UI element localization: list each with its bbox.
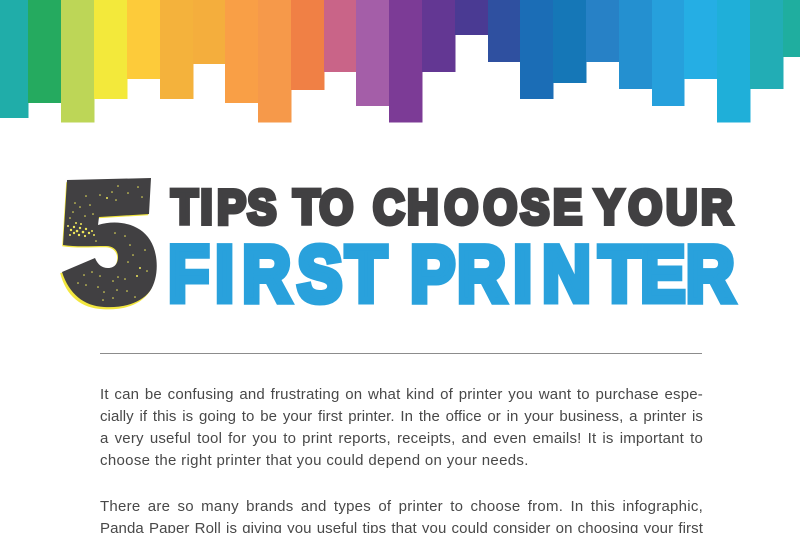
heading line one: tips to choose your xyxy=(171,180,732,234)
intro paragraph one xyxy=(100,386,703,469)
heading line one: tips to choose your: YOUR xyxy=(595,180,732,234)
heading line two: first printer: FIRST xyxy=(168,230,387,318)
icon: speckled number 5 xyxy=(60,178,157,309)
heading line one: tips to choose your: TO xyxy=(293,180,353,234)
heading line one: tips to choose your: TIPS xyxy=(171,180,276,234)
divider rule xyxy=(100,353,702,354)
heading line two: first printer xyxy=(168,230,734,318)
heading line two: first printer: PRINTER xyxy=(410,230,734,318)
colour bar skyline xyxy=(0,0,800,122)
title: 5 tips to choose your first printer xyxy=(60,178,738,318)
heading line one: tips to choose your: CHOOSE xyxy=(373,180,582,234)
intro paragraph one: It can be confusing and frustrating on what kind of printer you want to purchase espe- xyxy=(100,386,703,402)
intro paragraph one: a very useful tool for you to print reports, receipts, and even emails! It is important to xyxy=(100,430,703,447)
intro paragraph two xyxy=(100,498,703,533)
intro paragraph one: choose the right printer that you could depend on your needs. xyxy=(100,452,529,469)
intro paragraph two: There are so many brands and types of printer to choose from. In this infographic, xyxy=(100,498,703,514)
intro paragraph one: cially if this is going to be your first printer. In the office or in your business, a printer is xyxy=(100,408,703,425)
